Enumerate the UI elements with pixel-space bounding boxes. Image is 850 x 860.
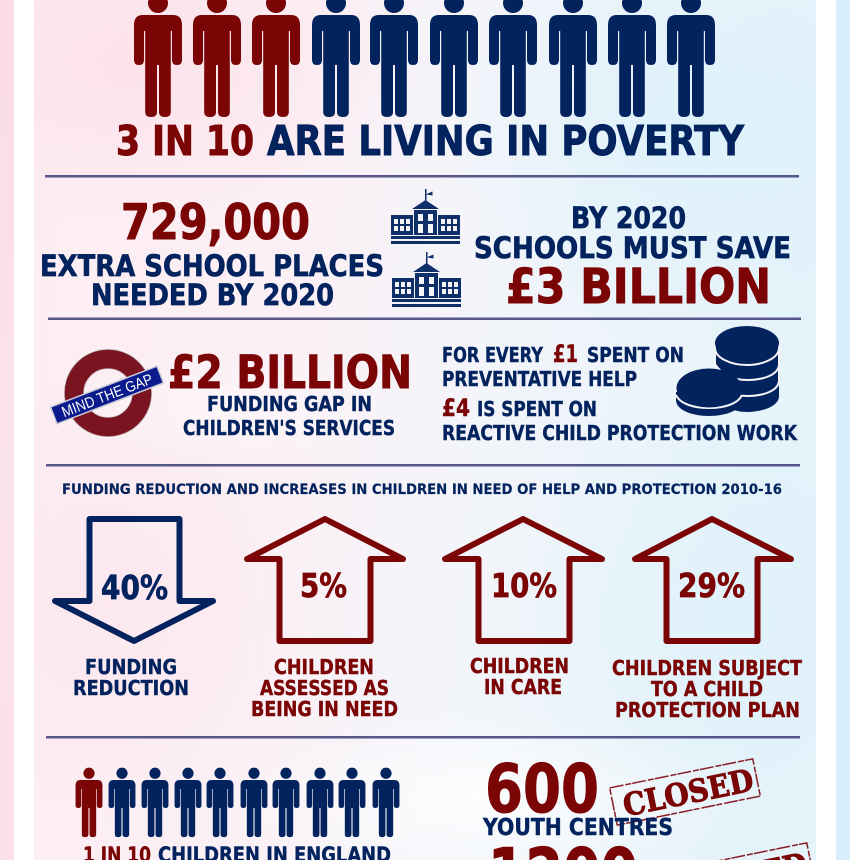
heading: funding reduction and increases: FUNDING REDUCTION AND INCREASES IN CHILDREN IN NEED OF HELP AND PROTECTION 2010-16 [62,482,782,498]
arrow: 29% child protection plan: CHILDREN SUBJECT [612,656,802,680]
text: preventative versus reactive spending: SPENT ON [587,343,684,367]
text: preventative versus reactive spending: £4 [442,394,470,422]
heading: 3 in 10 are living in poverty [116,117,745,165]
arrow: 40% funding reduction [55,519,213,700]
arrow: 29% child protection plan: TO A CHILD [651,677,763,701]
arrow: 5% children assessed as being in need: BEING IN NEED [251,697,398,721]
stat: 2 billion funding gap: CHILDREN'S SERVICES [183,416,395,440]
stat: 729,000 extra school places: NEEDED BY 2020 [91,278,334,312]
text: preventative versus reactive spending: PREVENTATIVE HELP [442,367,637,391]
arrow: 10% children in care: CHILDREN [470,654,569,678]
icon: schools [391,189,461,307]
stat: 600 youth centres: 600 [485,750,599,828]
stat: 729,000 extra school places [40,194,384,312]
arrow: 40% funding reduction: 40% [101,568,168,607]
stat: 2 billion funding gap [168,346,412,440]
text: preventative versus reactive spending: REACTIVE CHILD PROTECTION WORK [442,421,798,445]
stat: 729,000 extra school places: EXTRA SCHOOL PLACES [40,249,384,283]
arrow: 5% children assessed as being in need [247,519,403,721]
heading: 3 in 10 are living in poverty: ARE LIVING IN POVERTY [267,117,745,165]
stat: 600 youth centres [482,750,673,841]
text: preventative versus reactive spending: IS SPENT ON [477,397,597,421]
stat: 600 youth centres: YOUTH CENTRES [482,815,673,841]
icon: mind the gap roundel: MIND THE GAP [60,371,155,421]
stat: 729,000 extra school places: 729,000 [121,194,310,251]
pictogram: 3 in 10 people [134,0,715,117]
arrow: 10% children in care [445,519,602,699]
stat: schools must save 3 billion [474,201,791,315]
text: preventative versus reactive spending: FOR EVERY [442,343,543,367]
stat: schools must save 3 billion: BY 2020 [571,201,686,235]
pictogram: 1 in 10 children [76,768,399,837]
heading: 3 in 10 are living in poverty: 3 IN 10 [116,117,254,165]
stat: 2 billion funding gap: £2 BILLION [168,346,412,399]
text: 1 in 10 children in England [83,843,391,860]
arrow: 40% funding reduction: FUNDING [85,655,177,679]
stat: 2 billion funding gap: FUNDING GAP IN [207,392,372,416]
stat: schools must save 3 billion: SCHOOLS MUST SAVE [474,231,791,265]
text: preventative versus reactive spending [442,340,798,445]
arrow: 5% children assessed as being in need: ASSESSED AS [260,676,389,700]
arrow: 5% children assessed as being in need: CHILDREN [274,655,374,679]
arrow: 5% children assessed as being in need: 5% [300,566,347,605]
arrow: 29% child protection plan: 29% [678,566,745,605]
arrow: 29% child protection plan [612,519,802,722]
arrow: 10% children in care: 10% [491,566,557,605]
text: preventative versus reactive spending: £1 [553,340,578,368]
arrow: 40% funding reduction: REDUCTION [73,676,189,700]
arrow: 29% child protection plan: PROTECTION PLAN [615,698,800,722]
stamp: closed: CLOSED [620,763,757,824]
stat: schools must save 3 billion: £3 BILLION [506,259,771,315]
icon: coins [676,326,779,416]
arrow: 10% children in care: IN CARE [484,675,562,699]
